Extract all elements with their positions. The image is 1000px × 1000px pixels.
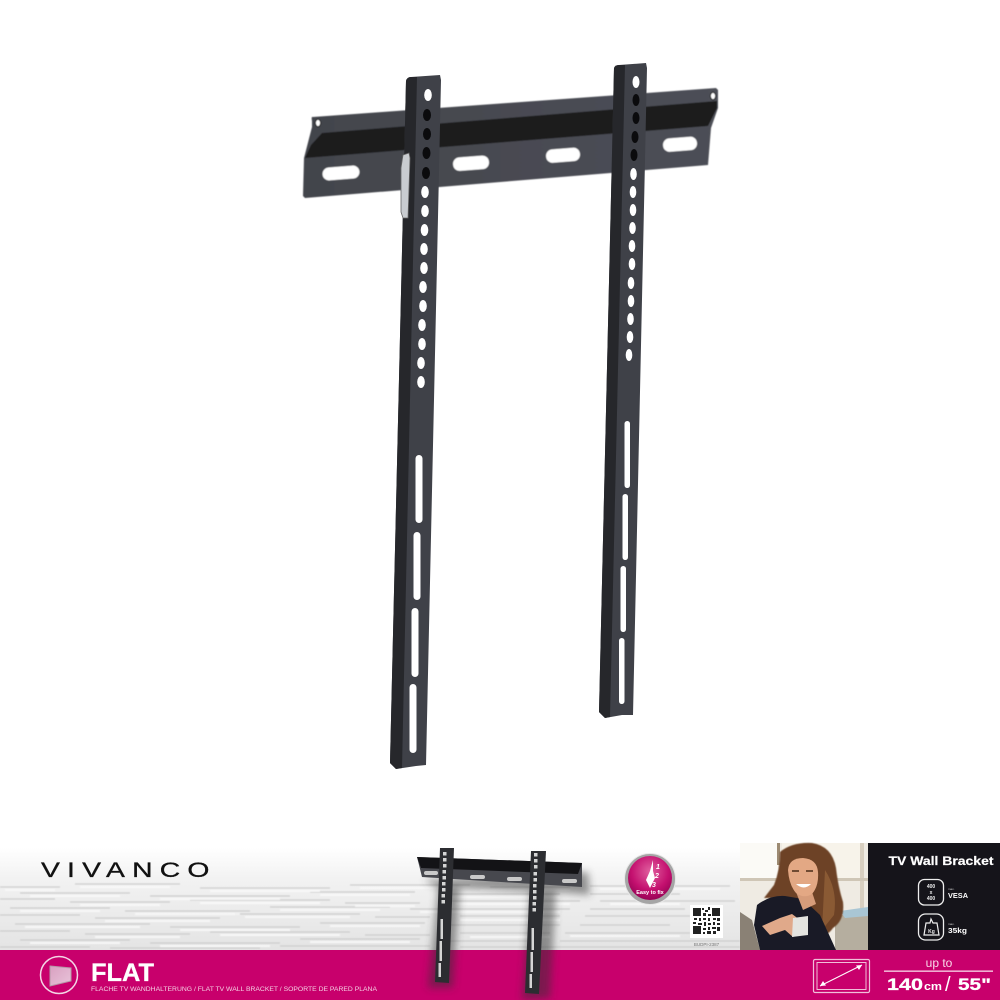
label: VESA [948, 887, 968, 900]
label: VESA: VESA [948, 893, 968, 900]
size: 140cm / 55": 140 [887, 975, 923, 994]
arm and remote [762, 914, 803, 937]
panel: product specs [868, 843, 1000, 950]
size: 140cm / 55" [887, 974, 991, 996]
left vertical bar [390, 75, 441, 769]
label: up to: up to [926, 956, 953, 970]
label: 35kg: max. [948, 922, 955, 926]
heading: FLAT: FLAT [91, 959, 154, 987]
icon: VESA size: x [930, 890, 933, 896]
size: 140cm / 55": cm [924, 981, 942, 993]
face [788, 858, 818, 896]
badge: easy to fix: Easy to fix [636, 890, 665, 896]
label: VESA: max. [948, 887, 955, 891]
small bracket product image [417, 848, 590, 1000]
bottom banner: textured wall background [0, 848, 740, 950]
top [754, 896, 836, 950]
badge: easy to fix: 3 [652, 882, 656, 889]
badge: easy to fix: 2 [654, 873, 659, 880]
icon: weight: Kg [928, 929, 935, 935]
icon: VESA size: 400 [927, 884, 935, 890]
magenta band [0, 950, 1000, 1000]
icon: flat TV circle [40, 956, 78, 994]
right vertical bar [599, 63, 647, 718]
badge: easy to fix: 1 [656, 864, 660, 871]
icon: screen size [814, 960, 870, 992]
label: 35kg: 35kg [948, 926, 967, 935]
neck, chest [796, 892, 816, 910]
photo: woman with remote [740, 843, 868, 950]
sofa [835, 913, 868, 950]
badge: easy to fix [624, 854, 676, 904]
product code: BUDPI-2387 [694, 942, 720, 947]
subtitle: product names: FLACHE TV WANDHALTERUNG / FLAT TV WALL BRACKET / SOPORTE DE PARED PLANA [91, 987, 377, 993]
label: 35kg [948, 922, 967, 935]
size: 140cm / 55": / [945, 974, 951, 996]
silver clip [401, 153, 410, 218]
divider [884, 970, 993, 972]
panel title: TV Wall Bracket [888, 854, 994, 868]
hair [764, 843, 843, 936]
size: 140cm / 55": 55" [958, 975, 991, 994]
main product: wall bracket [303, 63, 718, 769]
logo: VIVANCO: VIVANCO [41, 858, 217, 882]
horizontal wall plate [303, 88, 718, 198]
icon: VESA size [918, 880, 944, 905]
icon: VESA size: 400 [927, 896, 935, 902]
QR code [690, 905, 723, 938]
